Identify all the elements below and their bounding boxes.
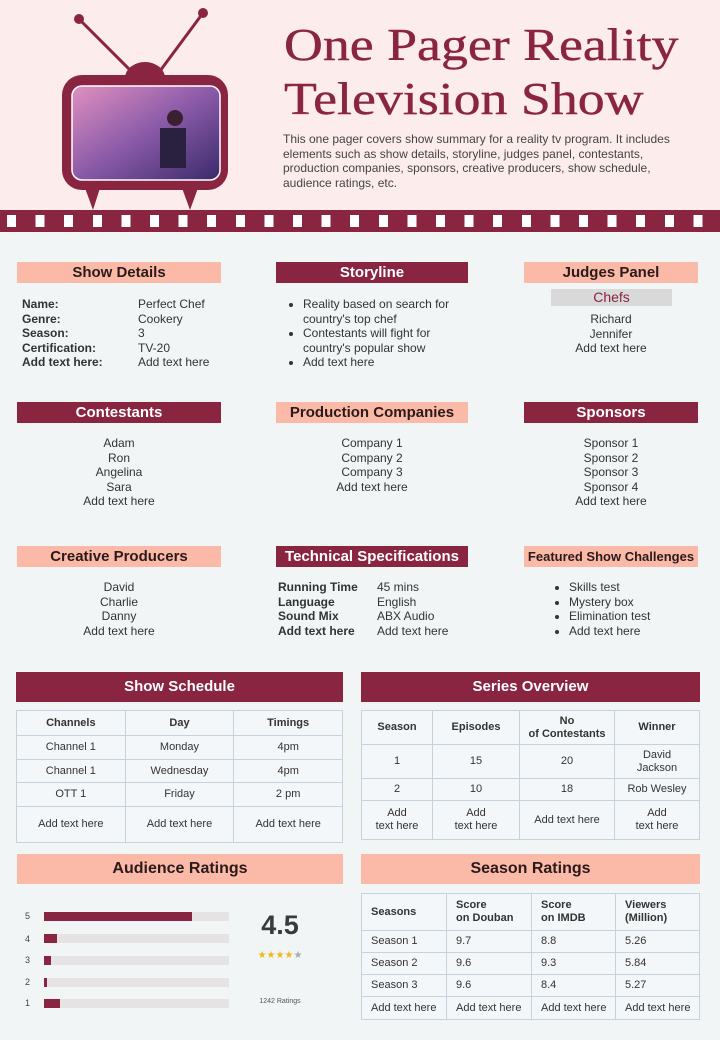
panel: sponsors: Sponsor 3 <box>584 465 638 479</box>
panel: technical specifications: Add text here <box>278 624 355 638</box>
panel: show details: 3 <box>138 326 145 340</box>
panel: technical specifications: Running Time <box>278 580 358 594</box>
intro text: This one pager covers show summary for a reality tv program. It includes elements such as show details, storyline, judges panel, contestants, production companies, sponsors, creative producers, show schedule, audience ratings, etc. <box>283 132 670 190</box>
panel: show details: Perfect Chef <box>138 297 205 311</box>
table: season ratings: on Douban <box>456 912 513 924</box>
heading: season ratings <box>361 854 700 884</box>
heading: show schedule: Show Schedule <box>124 678 235 695</box>
table: show schedule: Timings <box>267 716 309 728</box>
table: series overview: 20 <box>561 755 573 767</box>
table: season ratings: 5.26 <box>625 935 646 947</box>
table: season ratings: Add text here <box>625 1002 690 1014</box>
panel: creative producers: David <box>104 580 134 594</box>
panel: featured show challenges: Featured Show Challenges <box>528 549 694 564</box>
table: season ratings: Add text here <box>541 1002 606 1014</box>
table: show schedule: 2 pm <box>276 788 300 800</box>
table: show schedule <box>16 710 343 843</box>
title: Television Show <box>284 73 644 124</box>
rating score: 1242 Ratings <box>259 998 301 1005</box>
header background <box>0 0 720 210</box>
table: season ratings: Season 2 <box>371 957 417 969</box>
table: show schedule: OTT 1 <box>55 788 86 800</box>
table: season ratings: 9.7 <box>456 935 471 947</box>
panel: storyline: Storyline <box>340 264 404 281</box>
panel: sponsors: Sponsor 2 <box>584 450 638 464</box>
chart: audience ratings bars: 4 <box>25 934 30 944</box>
table: season ratings: Season 3 <box>371 979 417 991</box>
table: season ratings: 9.6 <box>456 957 471 969</box>
table: season ratings: 8.4 <box>541 979 556 991</box>
panel: storyline: Add text here <box>303 355 374 369</box>
panel: contestants: Ron <box>108 450 130 464</box>
table: show schedule: Channels <box>46 716 96 728</box>
panel: technical specifications: Language <box>278 594 335 608</box>
chart: audience ratings bars: 3 <box>25 955 30 965</box>
icon: tv <box>62 8 228 210</box>
panel: production companies <box>276 402 468 494</box>
table: season ratings: 5.84 <box>625 957 646 969</box>
table: show schedule: Add text here <box>255 818 321 830</box>
panel: featured show challenges: Add text here <box>569 624 640 638</box>
panel: creative producers: Add text here <box>83 624 155 638</box>
rating score <box>258 910 302 1005</box>
table: series overview: text here <box>636 820 678 832</box>
table: season ratings <box>361 893 700 1020</box>
panel: show details <box>17 262 221 369</box>
table: series overview: Jackson <box>637 762 677 774</box>
panel: featured show challenges: Skills test <box>569 580 620 594</box>
panel: sponsors: Sponsor 4 <box>584 480 638 494</box>
panel: contestants: Add text here <box>83 494 155 508</box>
heading: audience ratings <box>17 854 343 884</box>
panel: creative producers: Charlie <box>100 594 138 608</box>
table: show schedule: 4pm <box>277 741 299 753</box>
table: season ratings: Score <box>456 899 487 911</box>
table: series overview: text here <box>455 820 497 832</box>
panel: creative producers: Danny <box>102 609 136 623</box>
table: season ratings: 9.3 <box>541 957 556 969</box>
panel: judges panel: Chefs <box>593 289 630 305</box>
panel: sponsors: Sponsors <box>576 404 646 421</box>
table: season ratings: 9.6 <box>456 979 471 991</box>
table: season ratings: Viewers <box>625 899 666 911</box>
panel: sponsors <box>524 402 698 508</box>
table: season ratings: Add text here <box>456 1002 521 1014</box>
panel: technical specifications: Sound Mix <box>278 609 339 623</box>
panel: featured show challenges: Mystery box <box>569 594 634 608</box>
panel: show details: Genre: <box>22 312 61 326</box>
table: series overview: David <box>643 748 671 760</box>
table: season ratings: (Million) <box>625 912 667 924</box>
panel: creative producers <box>17 546 221 638</box>
panel: judges panel: Judges Panel <box>563 264 659 281</box>
chart: audience ratings bars <box>25 911 229 1008</box>
panel: technical specifications: Technical Specifications <box>285 548 459 565</box>
table: show schedule: Monday <box>160 741 199 753</box>
heading: series overview <box>361 672 700 702</box>
panel: production companies: Production Companies <box>290 404 454 421</box>
table: show schedule: Friday <box>164 788 195 800</box>
panel: show details: Cookery <box>138 312 183 326</box>
panel: contestants: Angelina <box>96 465 142 479</box>
table: series overview: No <box>560 714 574 726</box>
panel: production companies: Company 3 <box>341 465 403 479</box>
table: series overview: Season <box>377 721 417 733</box>
panel: technical specifications: English <box>377 594 416 608</box>
table: show schedule: Day <box>169 716 190 728</box>
panel: judges panel: Jennifer <box>590 326 632 340</box>
panel: production companies: Add text here <box>336 480 408 494</box>
panel: production companies: Company 2 <box>341 450 403 464</box>
panel: featured show challenges <box>524 546 698 638</box>
panel: sponsors: Sponsor 1 <box>584 436 638 450</box>
panel: contestants: Sara <box>106 480 132 494</box>
table: season ratings: 8.8 <box>541 935 556 947</box>
panel: storyline: Reality based on search for country's top chef <box>303 297 449 326</box>
table: series overview: Winner <box>638 721 676 733</box>
panel: technical specifications: ABX Audio <box>377 609 434 623</box>
panel: featured show challenges: Elimination test <box>569 609 650 623</box>
panel: show details: Name: <box>22 297 59 311</box>
chart: audience ratings bars: 1 <box>25 998 30 1008</box>
table: series overview: 18 <box>561 783 573 795</box>
table: season ratings: Season 1 <box>371 935 417 947</box>
table: show schedule: Wednesday <box>151 764 208 776</box>
panel: show details: Add text here: <box>22 355 103 369</box>
table: series overview: 10 <box>470 783 482 795</box>
table: series overview: Add <box>647 807 667 819</box>
table: show schedule: Channel 1 <box>46 741 96 753</box>
heading: season ratings: Season Ratings <box>470 860 591 877</box>
table: series overview: 2 <box>394 783 400 795</box>
table: series overview: 15 <box>470 755 482 767</box>
panel: show details: Add text here <box>138 355 209 369</box>
title: One Pager Reality <box>284 19 679 70</box>
heading: show schedule <box>16 672 343 702</box>
table: season ratings: Score <box>541 899 572 911</box>
table: series overview: 1 <box>394 755 400 767</box>
table: show schedule: Add text here <box>147 818 212 830</box>
panel: storyline: Contestants will fight for country's popular show <box>303 326 430 354</box>
panel: creative producers: Creative Producers <box>50 548 188 565</box>
panel: judges panel: Richard <box>590 312 632 326</box>
panel: technical specifications <box>276 546 468 638</box>
panel: production companies: Company 1 <box>341 436 403 450</box>
table: season ratings: on IMDB <box>541 912 586 924</box>
table: series overview: of Contestants <box>528 728 606 740</box>
panel: contestants <box>17 402 221 508</box>
panel: show details: Certification: <box>22 340 96 354</box>
table: season ratings: Add text here <box>371 1002 436 1014</box>
table: show schedule: 4pm <box>277 764 299 776</box>
panel: show details: Season: <box>22 326 69 340</box>
table: series overview: text here <box>376 820 418 832</box>
panel: contestants: Contestants <box>76 404 162 421</box>
panel: judges panel <box>524 262 698 355</box>
table: series overview <box>361 710 700 840</box>
heading: series overview: Series Overview <box>473 678 588 695</box>
table: series overview: Add text here <box>534 814 600 826</box>
panel: technical specifications: Add text here <box>377 624 448 638</box>
film strip <box>0 210 720 232</box>
panel: show details: Show Details <box>72 264 166 281</box>
panel: show details: TV-20 <box>138 340 170 354</box>
table: show schedule: Channel 1 <box>46 764 96 776</box>
panel: contestants: Adam <box>103 436 135 450</box>
title <box>284 19 679 124</box>
table: series overview: Rob Wesley <box>627 783 687 795</box>
chart: audience ratings bars: 2 <box>25 977 30 987</box>
chart: audience ratings bars: 5 <box>25 911 30 921</box>
panel: storyline <box>276 262 468 369</box>
heading: audience ratings: Audience Ratings <box>112 860 248 877</box>
panel: judges panel: Add text here <box>575 341 647 355</box>
table: season ratings: Seasons <box>371 906 416 918</box>
table: series overview: Add <box>387 807 407 819</box>
table: series overview: Episodes <box>452 721 500 733</box>
table: season ratings: 5.27 <box>625 979 646 991</box>
panel: sponsors: Add text here <box>575 494 647 508</box>
panel: technical specifications: 45 mins <box>377 580 419 594</box>
rating score: 4.5 <box>261 910 299 940</box>
table: series overview: Add <box>466 807 486 819</box>
rating score: ★★★★★ <box>258 950 302 961</box>
table: show schedule: Add text here <box>38 818 104 830</box>
